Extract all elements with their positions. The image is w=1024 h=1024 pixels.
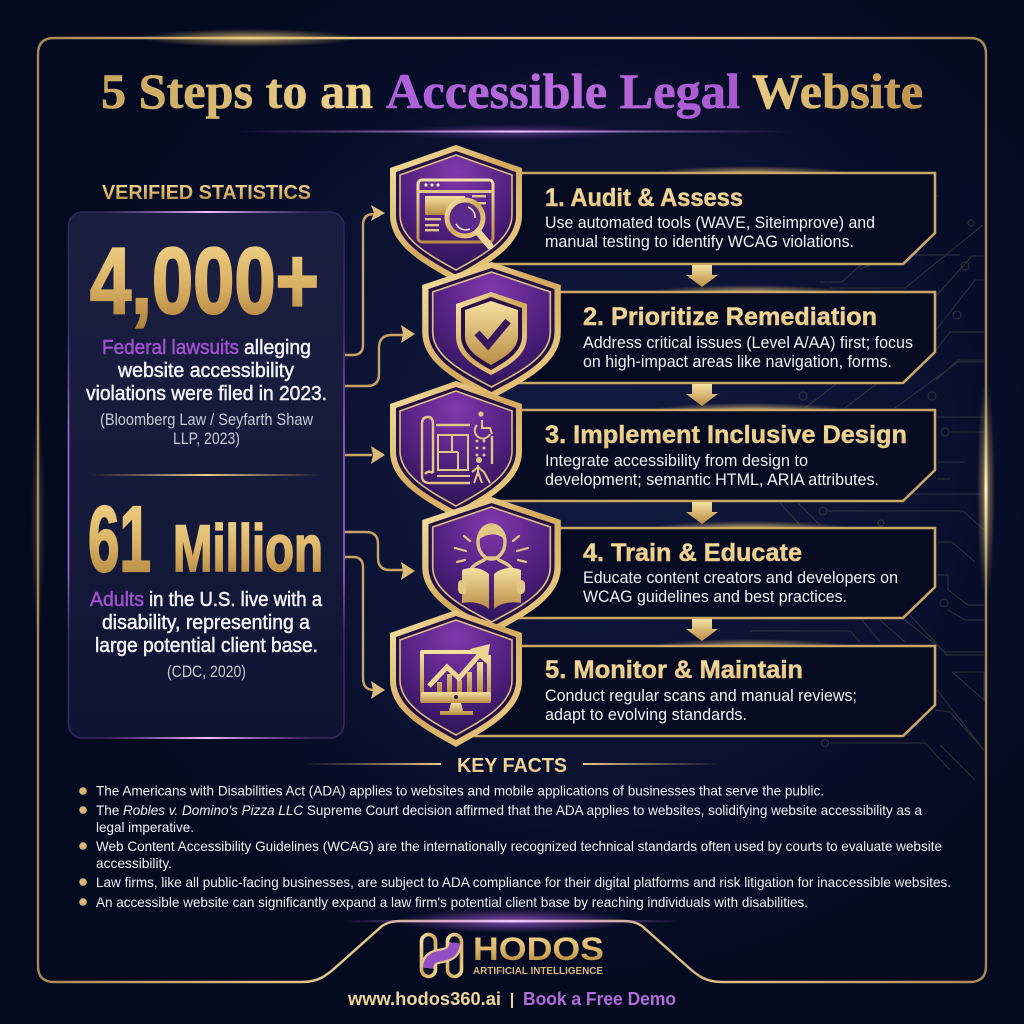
step 4 description: Educate content creators and developers on [583,569,898,587]
title [101,63,923,119]
stat: 61 Million: Million [173,511,323,585]
arrow: step 3 to 4 [686,502,718,524]
step 1 title: 1. Audit & Assess [545,184,743,212]
title: 5 Steps to an [101,63,373,119]
title underline [235,130,795,132]
stat description: lawsuits: Federal lawsuits [102,337,239,359]
title: Website [752,63,923,119]
panel: statistics [68,211,344,739]
key facts list: Web Content Accessibility Guidelines (WCAG) are the internationally recognized technical standards often used by courts to evaluate website [96,838,942,854]
citation: Bloomberg: (Bloomberg Law / Seyfarth Shaw [100,411,313,429]
stat description: adults: in the U.S. live with a [149,589,323,611]
stat: 61 Million [88,487,323,591]
shield 2: check icon [422,262,561,399]
stat description: lawsuits: violations were filed in 2023. [86,383,327,405]
step 5 description: adapt to evolving standards. [545,706,747,724]
frame highlights [150,37,988,580]
step 5 description: Conduct regular scans and manual reviews; [545,687,857,705]
step 2 description: Address critical issues (Level A/AA) first; focus [583,334,913,352]
key facts list: The Americans with Disabilities Act (ADA) applies to websites and mobile applications of businesses that serve the public. [96,782,824,798]
step 2 description [583,334,913,371]
key facts list: An accessible website can significantly expand a law firm's potential client base by reaching individuals with disabilities. [96,894,808,910]
shield 5: monitoring icon [390,610,522,747]
citation: Bloomberg [100,411,313,448]
step banner 1 [470,166,935,264]
arrow: step 2 to 3 [686,384,718,406]
footer contact line: Book a Free Demo [523,989,676,1009]
step banner 2 [500,285,935,383]
shield 3: design icon [390,381,522,518]
stat: 4,000+: 4,000+ [90,228,319,333]
stat description: adults: large potential client base. [95,635,318,657]
stat description: lawsuits [86,337,327,405]
key facts heading: KEY FACTS [457,755,567,777]
shield 1: audit icon [390,145,522,282]
connector arrows [345,205,415,699]
step 2 description: on high-impact areas like navigation, forms. [583,353,892,371]
title: Accessible Legal [386,63,740,119]
key facts list: legal imperative. [96,819,194,835]
step 3 description: Integrate accessibility from design to [545,452,808,470]
stat description: adults: disability, representing a [102,612,311,634]
stat description: adults [90,589,323,657]
key facts list [79,782,951,910]
step 1 description: Use automated tools (WAVE, Siteimprove) and [545,214,875,232]
key facts list: The Robles v. Domino's Pizza LLC Supreme Court decision affirmed that the ADA applies to websites, solidifying website accessibility as a [96,802,922,818]
step 3 description: development; semantic HTML, ARIA attributes. [545,471,879,489]
stat description: lawsuits: alleging [244,337,311,359]
step 4 title: 4. Train & Educate [583,539,802,567]
stat: 61 Million: 61 [88,487,151,591]
logo wordmark: ARTIFICIAL INTELLIGENCE [473,966,603,977]
step 1 description [545,214,875,251]
logo mark [422,934,462,976]
footer contact line: www.hodos360.ai [347,989,501,1009]
step 4 description [583,569,898,606]
step 3 description [545,452,879,489]
divider [90,474,322,476]
key facts list: accessibility. [96,855,172,871]
citation: Bloomberg: LLP, 2023) [173,430,240,448]
step 3 title: 3. Implement Inclusive Design [545,421,907,449]
step 5 title: 5. Monitor & Maintain [545,656,803,684]
stat description: lawsuits: website accessibility [117,360,294,382]
step 5 description [545,687,857,724]
notch highlight [340,920,684,922]
arrow: step 1 to 2 [686,265,718,287]
step banner 4 [500,521,935,618]
step banner 3 [470,403,935,501]
key facts list: Law firms, like all public-facing businesses, are subject to ADA compliance for their digital platforms and risk litigation for inaccessible websites. [96,874,951,890]
shield 4: training icon [422,497,561,634]
arrow: step 4 to 5 [686,619,718,641]
step 2 title: 2. Prioritize Remediation [583,303,877,331]
footer contact line [347,989,676,1009]
stat description: adults: Adults [90,589,144,611]
heading: verified statistics: VERIFIED STATISTICS [102,182,311,204]
step 4 description: WCAG guidelines and best practices. [583,588,847,606]
step 1 description: manual testing to identify WCAG violations. [545,233,854,251]
citation: CDC: (CDC, 2020) [167,663,246,681]
step banner 5 [470,639,935,736]
logo wordmark: HODOS [473,931,604,967]
circuit decoration [750,195,984,780]
